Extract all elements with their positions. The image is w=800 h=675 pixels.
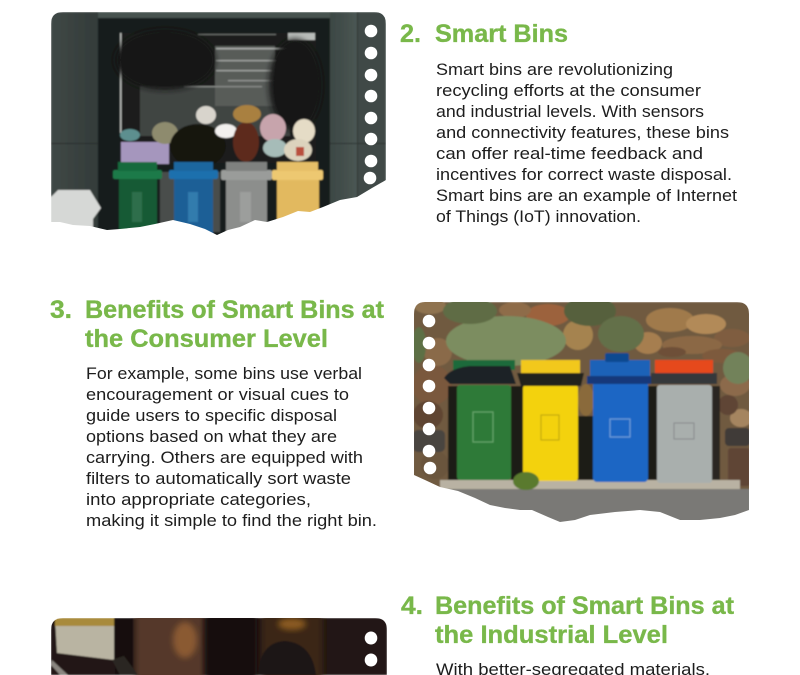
text block: section 3 body: encouragement or visual cues to bbox=[86, 385, 349, 404]
photo: smart bins in front of a plush toy window bbox=[51, 12, 386, 237]
text block: section 3 body bbox=[86, 364, 377, 530]
text block: section 2 body: can offer real-time feedback and bbox=[436, 144, 703, 163]
perforation holes: photo two bbox=[423, 315, 436, 474]
bin: gray bbox=[651, 360, 717, 483]
text block: section 2 body bbox=[436, 60, 737, 226]
bin: green bbox=[113, 162, 162, 234]
perforation holes: photo one bbox=[364, 25, 377, 184]
text block: section 2 body: of Things (IoT) innovation. bbox=[436, 207, 641, 226]
heading: section 4: Benefits of Smart Bins at bbox=[435, 592, 735, 620]
text block: section 2 body: Smart bins are an example of Internet bbox=[436, 186, 737, 205]
heading: section 4 bbox=[401, 592, 735, 649]
text block: section 3 body: For example, some bins use verbal bbox=[86, 364, 362, 383]
text block: section 2 body: and connectivity features, these bins bbox=[436, 123, 729, 142]
perforation holes: photo three bbox=[365, 632, 377, 666]
bin: gray bbox=[221, 162, 272, 236]
heading: section 3: 3. bbox=[50, 296, 72, 324]
heading: section 3 bbox=[50, 296, 385, 353]
rocks on the hillside bbox=[412, 298, 752, 486]
text block: section 2 body: recycling efforts at the consumer bbox=[436, 81, 701, 100]
text block: section 3 body: carrying. Others are equipped with bbox=[86, 448, 363, 467]
heading: section 2: Smart Bins bbox=[435, 20, 568, 48]
heading: section 3: the Consumer Level bbox=[85, 325, 328, 353]
bin: blue bbox=[587, 353, 652, 482]
photo: woman in a dim interior bbox=[51, 612, 387, 675]
icon: shrubs bbox=[412, 296, 753, 384]
heading: section 2: 2. bbox=[400, 20, 421, 48]
text block: section 3 body: making it simple to find the right bin. bbox=[86, 511, 377, 530]
text block: section 3 body: filters to automatically sort waste bbox=[86, 469, 351, 488]
text block: section 3 body: guide users to specific disposal bbox=[86, 406, 337, 425]
text block: section 3 body: options based on what they are bbox=[86, 427, 337, 446]
bin: yellow bbox=[271, 160, 324, 220]
photo: four coloured bins against a rocky hillside bbox=[412, 296, 753, 524]
bin: yellow bbox=[517, 360, 584, 481]
text block: section 2 body: incentives for correct waste disposal. bbox=[436, 165, 732, 184]
text block: section 2 body: Smart bins are revolutionizing bbox=[436, 60, 673, 79]
bin: green bbox=[444, 360, 516, 480]
text block: section 2 body: and industrial levels. With sensors bbox=[436, 102, 704, 121]
heading: section 4: the Industrial Level bbox=[435, 621, 668, 649]
text block: section 3 body: into appropriate categories, bbox=[86, 490, 311, 509]
bin: blue bbox=[169, 162, 218, 236]
heading: section 3: Benefits of Smart Bins at bbox=[85, 296, 385, 324]
heading: section 4: 4. bbox=[401, 592, 423, 620]
